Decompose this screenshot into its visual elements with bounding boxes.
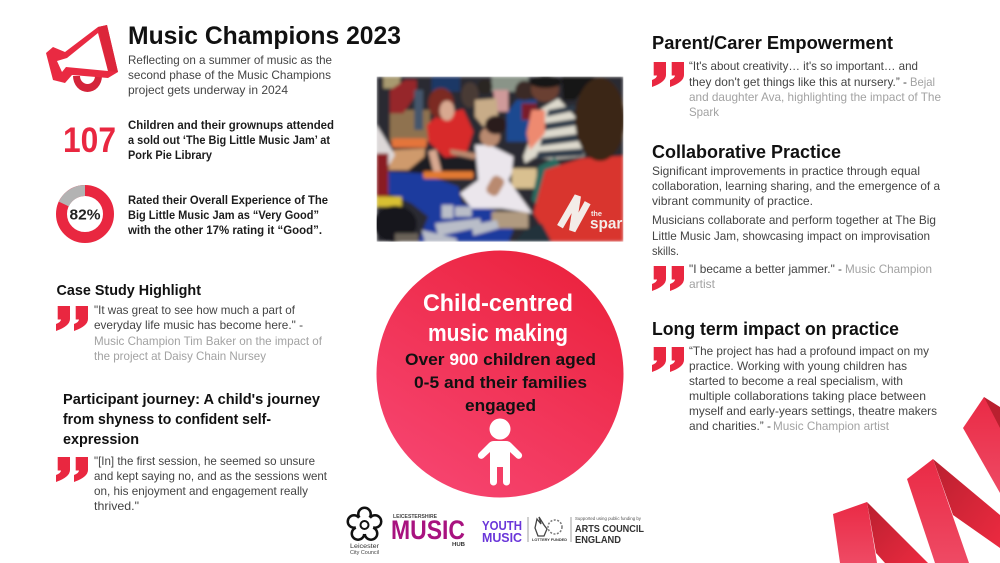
panel: long term impact on practice: started to become a real specialism, with [689, 374, 903, 388]
panel: participant journey: thrived." [94, 499, 139, 513]
callout: child-centred music making circle: 0-5 and their families [414, 373, 587, 392]
panel: participant journey [56, 391, 328, 513]
panel: parent/carer empowerment: they don't get things like this at nursery.” - [689, 75, 907, 89]
logo: Youth Music: YOUTH [482, 518, 522, 533]
stat: 107 attendees: 107 [63, 121, 116, 160]
panel: long term impact on practice: Music Champion artist [773, 419, 890, 433]
icon: megaphone [46, 25, 118, 92]
stat: 82% donut chart: with the other 17% rating it “Good”. [127, 223, 322, 237]
logo: Leicester City Council [346, 506, 382, 556]
stat: 107 attendees: Children and their grownups attended [128, 118, 334, 132]
icon: child figure [478, 418, 522, 486]
stat: 82% donut chart: 82% [70, 208, 101, 224]
panel: collaborative practice: "I became a better jammer." - [689, 262, 842, 276]
logo: Arts Council England: Supported using public funding by [575, 516, 642, 522]
panel: participant journey: Participant journey: A child's journey [63, 391, 321, 408]
panel: collaborative practice: Musicians collaborate and perform together at The Big [652, 213, 936, 227]
panel: participant journey: on, his enjoyment and engagement really [94, 484, 308, 498]
logo: Leicester City Council: Leicester [350, 543, 380, 550]
photo: children making music: spark [590, 215, 631, 232]
intro text: project gets underway in 2024 [128, 83, 288, 97]
callout: child-centred music making circle: music making [428, 320, 568, 347]
panel: case study highlight: "It was great to see how much a part of [94, 303, 296, 317]
title: Music Champions 2023 [128, 22, 401, 50]
panel: collaborative practice: skills. [652, 244, 679, 258]
panel: collaborative practice: Music Champion [845, 262, 932, 276]
panel: collaborative practice: artist [689, 277, 716, 291]
panel: collaborative practice: Little Music Jam, showcasing impact on improvisation [652, 229, 930, 243]
logo: Leicester City Council: City Council [350, 550, 379, 556]
panel: collaborative practice [652, 142, 940, 291]
logo: lottery funded: LOTTERY FUNDED [532, 537, 567, 542]
panel: participant journey: expression [63, 431, 139, 448]
logo: Leicestershire Music Hub: MUSIC [391, 515, 465, 545]
callout: child-centred music making circle [376, 250, 624, 498]
callout: child-centred music making circle: engaged [465, 396, 536, 415]
callout: child-centred music making circle: Child-centred [423, 290, 573, 317]
panel: parent/carer empowerment: Spark [689, 105, 720, 119]
stat: 107 attendees [63, 118, 334, 162]
stat: 107 attendees: a sold out ‘The Big Little Music Jam’ at [128, 133, 330, 147]
panel: case study highlight: Music Champion Tim Baker on the impact of [94, 334, 323, 348]
panel: parent/carer empowerment: Bejal [910, 75, 935, 89]
logo: Youth Music [482, 518, 523, 545]
panel: long term impact on practice [652, 319, 937, 433]
panel: participant journey: and kept saying no, and as the sessions went [94, 469, 328, 483]
callout: child-centred music making circle: Over 900 children aged [405, 350, 596, 369]
panel: case study highlight: Case Study Highlight [56, 282, 201, 299]
logo: Leicestershire Music Hub: HUB [452, 542, 465, 548]
panel: long term impact on practice: Long term impact on practice [652, 319, 899, 339]
logo: Leicestershire Music Hub: LEICESTERSHIRE [393, 514, 438, 520]
panel: case study highlight: everyday life music has become here." - [94, 318, 303, 332]
panel: collaborative practice: Significant improvements in practice through equal [652, 164, 920, 178]
panel: long term impact on practice: “The project has had a profound impact on my [689, 344, 929, 358]
panel: case study highlight [56, 282, 323, 363]
stat: 107 attendees: Pork Pie Library [128, 148, 212, 162]
panel: long term impact on practice: multiple collaborations taking place between [689, 389, 926, 403]
logo: Arts Council England: ENGLAND [575, 534, 621, 546]
photo: children making music: the [591, 209, 602, 218]
panel: long term impact on practice: myself and early-years settings, theatre makers [689, 404, 937, 418]
panel: participant journey: "[In] the first session, he seemed so unsure [94, 454, 315, 468]
panel: participant journey: from shyness to confident self- [63, 411, 271, 428]
stat: 82% donut chart: Big Little Music Jam as “Very Good” [128, 208, 319, 222]
intro text [128, 53, 332, 97]
logo: lottery funded [528, 517, 571, 542]
panel: collaborative practice: collaboration, learning sharing, and the emergence of a [652, 179, 940, 193]
stat: 82% donut chart [62, 190, 328, 238]
logo: Arts Council England: ARTS COUNCIL [575, 523, 644, 535]
logo: Arts Council England [575, 516, 644, 546]
decorative ribbon graphic: bottom right [833, 397, 1000, 563]
photo: children making music [373, 76, 631, 242]
intro text: second phase of the Music Champions [128, 68, 331, 82]
logo: Youth Music: MUSIC [482, 530, 523, 545]
intro text: Reflecting on a summer of music as the [128, 53, 332, 67]
panel: long term impact on practice: and charities.” - [689, 419, 771, 433]
panel: case study highlight: the project at Daisy Chain Nursey [94, 349, 266, 363]
panel: collaborative practice: Collaborative Practice [652, 142, 841, 162]
panel: collaborative practice: vibrant community of practice. [652, 194, 813, 208]
panel: parent/carer empowerment: and daughter Ava, highlighting the impact of The [689, 90, 941, 104]
panel: parent/carer empowerment [652, 33, 941, 119]
panel: parent/carer empowerment: Parent/Carer Empowerment [652, 33, 893, 53]
panel: parent/carer empowerment: “It's about creativity… it's so important… and [689, 59, 918, 73]
stat: 82% donut chart: Rated their Overall Experience of The [128, 193, 328, 207]
panel: long term impact on practice: practice. Working with young children has [689, 359, 907, 373]
